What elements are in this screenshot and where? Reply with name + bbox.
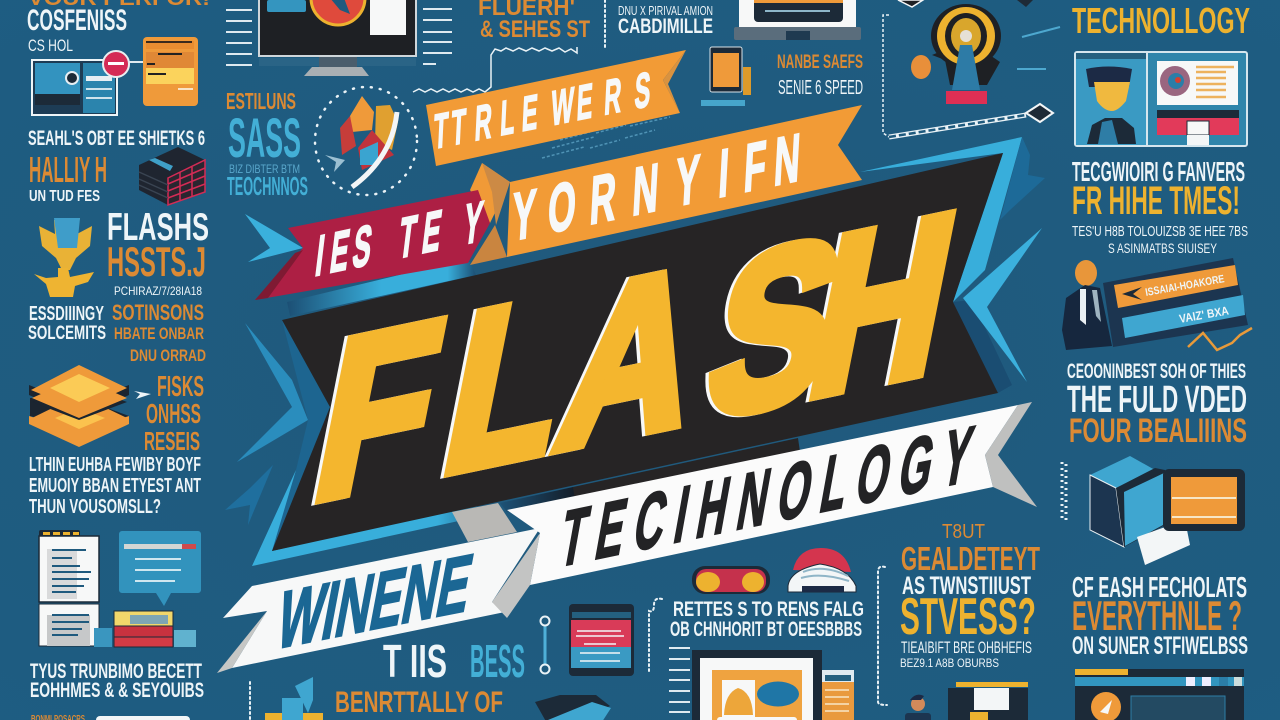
banner: top orange [426, 50, 686, 166]
title fill: FLASH [299, 165, 972, 549]
text: fisks: FISKS [157, 371, 204, 403]
text: gealdeteyt: GEALDETEYT [901, 540, 1040, 577]
text: dnu orrad: DNU ORRAD [130, 346, 206, 365]
icon: documents [39, 530, 99, 646]
text: ttrle wers: TTRLEWERS [432, 62, 652, 160]
dots [1062, 462, 1066, 520]
panel: black lower fill [560, 438, 800, 502]
text: small lines: S ASINMATBS SIUISEY [1108, 240, 1217, 256]
label: small caption: CS HOL [28, 36, 73, 55]
lines: left of monitor [226, 10, 252, 65]
icon: red badge [103, 51, 144, 77]
heading: cosfeniss: COSFENISS [27, 4, 127, 37]
text: closing lines: TYUS TRUNBIMO BECETT [30, 660, 202, 683]
icon: businessman with banner [1062, 258, 1248, 350]
panel: top centre: SASS [228, 106, 301, 169]
icon: businessman with banner: ISSAIAI-HOAKORE [1144, 273, 1225, 299]
icon: browser dark [1075, 669, 1244, 720]
icon: goggles [692, 566, 770, 594]
text: paragraph lines: THUN VOUSOMSLL? [29, 496, 161, 518]
icon: businessman with banner: VAIZ' BXA [1178, 303, 1230, 326]
panel: left column: HALLIY H [29, 149, 107, 190]
text: technology: TECIHNOLOGY [554, 408, 979, 584]
icon: tablet [701, 47, 751, 106]
text: small lines [1072, 223, 1248, 256]
panel: bottom centre [250, 521, 1040, 720]
lines: next to big screen [669, 648, 690, 712]
text: estiluns: ESTILUNS [226, 88, 296, 114]
icon: person at desk [905, 682, 1028, 720]
icon: side document [822, 670, 854, 720]
text: small lines [900, 638, 1032, 670]
text: ob chnhorit: OB CHNHORIT BT OEESBBBS [670, 618, 862, 641]
banner: middle orange [470, 105, 862, 265]
heading: hssts: HSSTS.J [107, 238, 206, 285]
panel: top centre: TEOCHNNOS [227, 171, 308, 201]
chart: orange zigzag [1188, 328, 1252, 350]
text: reseis: RESEIS [144, 426, 200, 456]
heading: flashs: FLASHS [107, 206, 209, 249]
icon: orange card [143, 37, 198, 106]
text: nanbe: NANBE SAEFS [777, 52, 863, 73]
icon: trophy [34, 218, 94, 297]
text: rettes: RETTES S TO RENS FALG [673, 598, 864, 621]
decoration: left spikes [225, 320, 330, 566]
icon: bottom white card [96, 716, 190, 720]
panel: top centre [226, 0, 1060, 201]
frame: blue under panel [252, 262, 500, 566]
banner: red [255, 189, 490, 300]
icon: cube with panel [1090, 456, 1245, 565]
text: winene: WINENE [271, 537, 479, 667]
text: onhss: ONHSS [146, 398, 201, 429]
connector: squiggle [604, 0, 606, 47]
text: small blue: BIZ DIBTER BTM [229, 162, 300, 176]
text: paragraph lines: EMUOIY BBAN ETYEST ANT [29, 475, 201, 497]
icon: figure in dotted circle [315, 87, 417, 195]
panel: right column [1062, 0, 1252, 720]
text: paragraph lines [29, 454, 201, 518]
text: bentally of: BENRTTALLY OF [335, 686, 503, 719]
text: yornyifn: YORNYIFN [510, 118, 802, 256]
icon: big screen [692, 650, 822, 720]
icon: server stack [139, 147, 205, 205]
icon: bottom dark shape [535, 695, 611, 720]
lines: light blue accents [1017, 27, 1060, 69]
text: closing lines: EOHHMES & & SEYOUIBS [30, 679, 204, 702]
decoration: left blue arrow [245, 214, 303, 262]
panel: left column [27, 0, 210, 720]
icon: bottom left box [250, 677, 323, 720]
text: un tud fes: UN TUD FES [29, 188, 100, 205]
icon: stacked layers [29, 365, 129, 447]
text: cabdimille: CABDIMILLE [618, 15, 713, 38]
text: small code: PCHIRAZ/7/28IA18 [114, 284, 202, 298]
arrow: small white [134, 391, 151, 399]
icon: medal [911, 4, 1001, 104]
icon: books [94, 611, 196, 647]
text: ies te y: IES TE Y [312, 189, 486, 289]
text: solcemits: SOLCEMITS [28, 323, 106, 344]
text: paragraph lines: LTHIN EUHBA FEWIBY BOYF [29, 454, 201, 476]
text: essdiiingy: ESSDIIINGY [29, 303, 104, 325]
text: small white: DNU X PIRIVAL AMION [618, 3, 713, 18]
icon: monitor [259, 0, 416, 76]
panel: black [272, 153, 1003, 551]
icon: chat bubble [119, 531, 201, 606]
text: t8ut: T8UT [942, 521, 985, 543]
icon: connector [540, 616, 550, 674]
connector: dotted right [878, 567, 887, 705]
text: sotinsons: SOTINSONS [112, 300, 204, 325]
panel: central banner composition [217, 50, 1045, 673]
icon: small top marks [898, 0, 1033, 7]
band: dark fade [500, 487, 575, 512]
text: closing lines [30, 660, 204, 702]
text: stvess: STVESS? [900, 588, 1036, 646]
icon: monitor two [734, 0, 861, 40]
text: small lines: TIEAIBIFT BRE OHBHEFIS [901, 638, 1032, 657]
text: senie: SENIE 6 SPEED [778, 77, 863, 99]
text: t its: T IIS [383, 635, 447, 687]
text: small lines: BEZ9.1 A8B OBURBS [900, 656, 999, 670]
icon: browser window [32, 60, 117, 115]
text: hbate onbar: HBATE ONBAR [114, 324, 204, 343]
lines: hatch text [542, 117, 670, 158]
icon: small tablet [569, 604, 634, 676]
connector: wave [413, 47, 577, 92]
decoration: right spikes [860, 137, 1045, 393]
title highlight: FLASH [296, 165, 969, 550]
title: flash [296, 165, 972, 550]
text: seahl: SEAHL'S OBT EE SHIETKS 6 [28, 127, 205, 150]
text: as twnstiiust: AS TWNSTIIUST [902, 572, 1031, 600]
lines: right of monitor [423, 9, 452, 64]
connector: dotted left [649, 599, 662, 671]
icon: profile screen [1075, 52, 1247, 146]
banner: white [217, 402, 1037, 673]
fold: grey [452, 402, 1037, 618]
connector: chain [883, 15, 1053, 137]
text: series st: & SEHES ST [480, 16, 590, 43]
panel: bottom centre: BESS [470, 635, 525, 687]
icon: cap [788, 548, 856, 592]
